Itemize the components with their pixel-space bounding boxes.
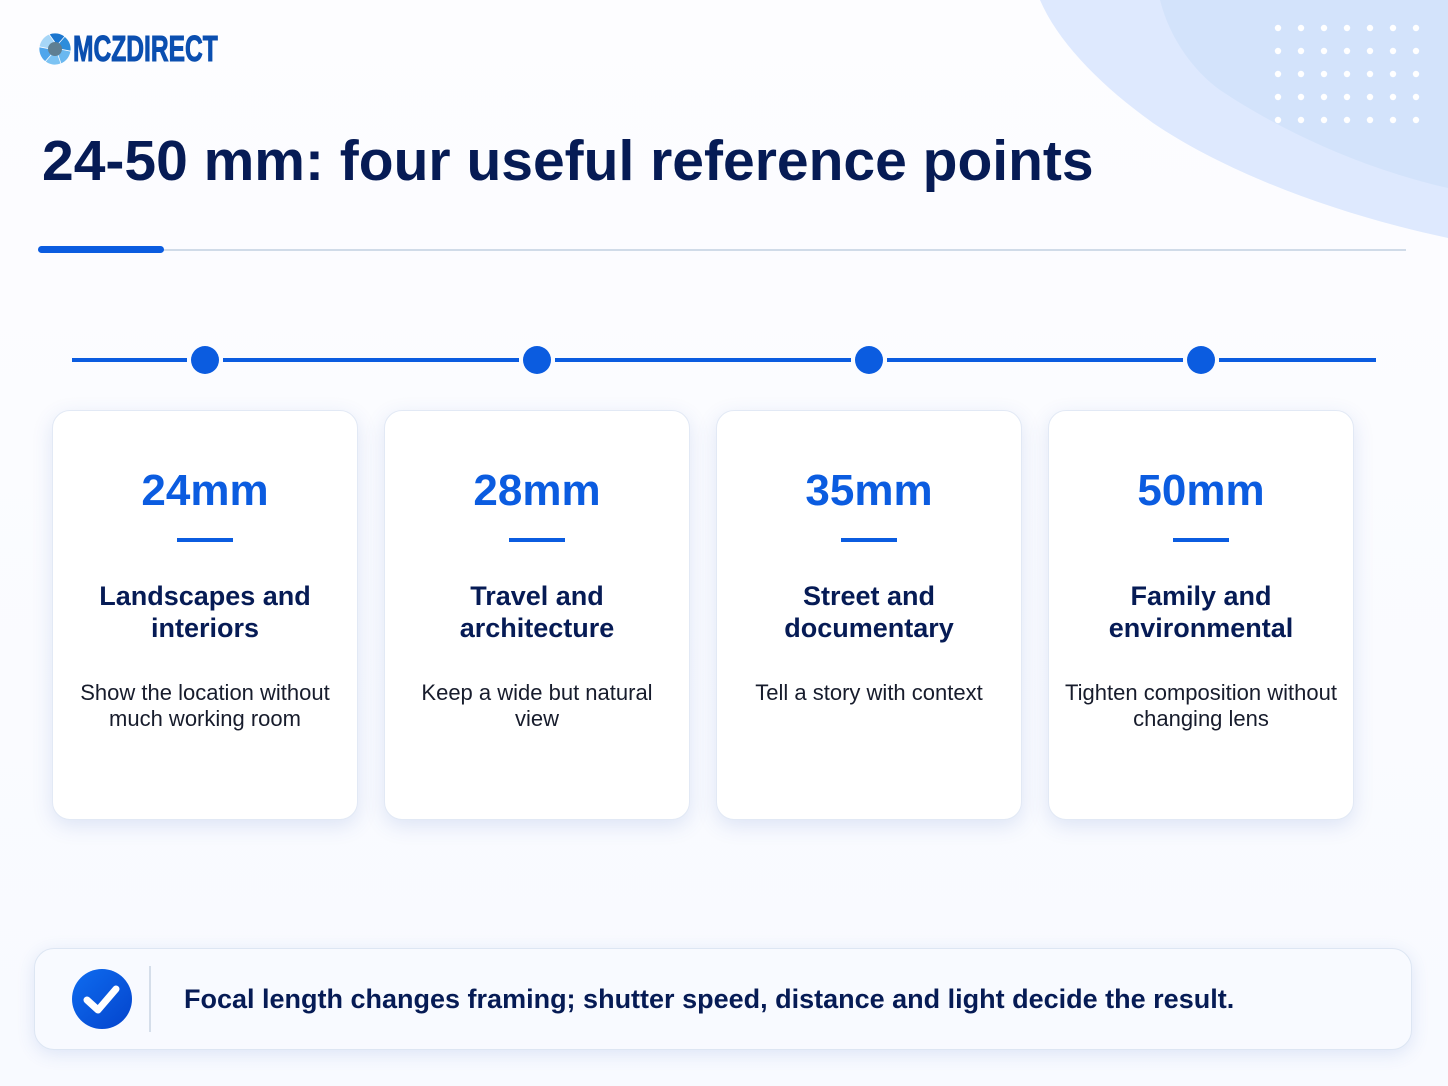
panel: 28mm card bbox=[384, 410, 690, 820]
use heading: Travel and bbox=[470, 581, 604, 611]
description: view bbox=[515, 706, 559, 731]
title divider bbox=[38, 246, 1406, 253]
description: changing lens bbox=[1133, 706, 1269, 731]
icon: camera aperture bbox=[39, 33, 71, 65]
use heading bbox=[784, 581, 954, 643]
panel: 24mm card bbox=[52, 410, 358, 820]
description bbox=[80, 680, 330, 731]
timeline bbox=[72, 346, 1376, 374]
description bbox=[421, 680, 653, 731]
description bbox=[1065, 680, 1337, 731]
panel: 50mm card bbox=[1048, 410, 1354, 820]
panel: 35mm card bbox=[716, 410, 1022, 820]
timeline dot 35mm bbox=[855, 346, 883, 374]
description: Keep a wide but natural bbox=[421, 680, 653, 705]
background corner shapes bbox=[1040, 0, 1448, 238]
use heading: environmental bbox=[1109, 613, 1293, 643]
use heading: architecture bbox=[460, 613, 614, 643]
use heading: Family and bbox=[1130, 581, 1272, 611]
callout bbox=[34, 948, 1412, 1050]
timeline dot 24mm bbox=[191, 346, 219, 374]
description: Show the location without bbox=[80, 680, 330, 705]
use heading bbox=[99, 581, 311, 643]
description: much working room bbox=[109, 706, 301, 731]
use heading: documentary bbox=[784, 613, 954, 643]
logo wordmark: MCZDIRECT bbox=[73, 28, 218, 69]
use heading bbox=[460, 581, 614, 643]
focal length: 24mm bbox=[141, 466, 269, 515]
timeline dot 50mm bbox=[1187, 346, 1215, 374]
title: 24-50 mm: four useful reference points bbox=[42, 129, 1094, 193]
use heading bbox=[1109, 581, 1293, 643]
callout text: Focal length changes framing; shutter speed, distance and light decide the result. bbox=[184, 984, 1234, 1014]
focal length: 50mm bbox=[1137, 466, 1265, 515]
timeline dot 28mm bbox=[523, 346, 551, 374]
description: Tell a story with context bbox=[755, 680, 983, 705]
use heading: Street and bbox=[803, 581, 935, 611]
focal length: 28mm bbox=[473, 466, 601, 515]
logo bbox=[39, 28, 218, 69]
use heading: interiors bbox=[151, 613, 259, 643]
focal length: 35mm bbox=[805, 466, 933, 515]
description: Tighten composition without bbox=[1065, 680, 1337, 705]
icon: check badge bbox=[72, 969, 132, 1029]
use heading: Landscapes and bbox=[99, 581, 311, 611]
